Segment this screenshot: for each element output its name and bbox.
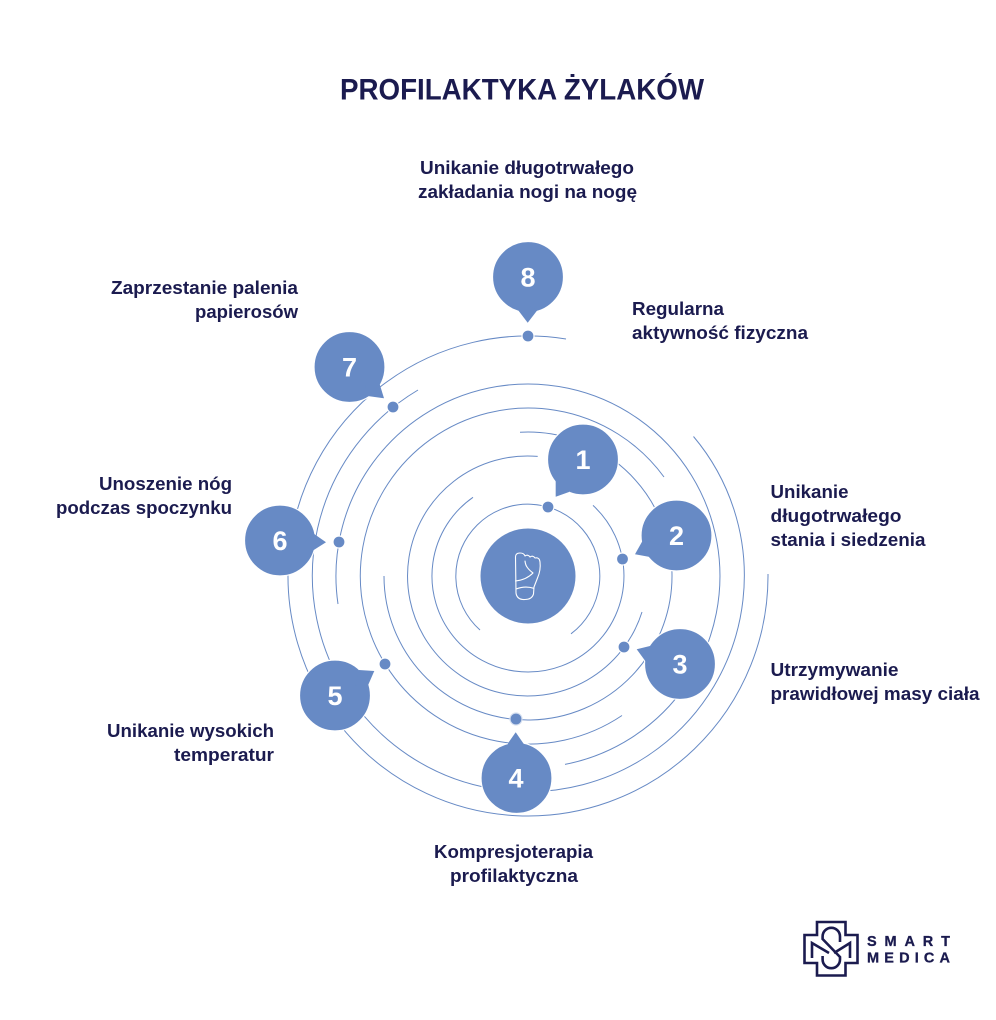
- bubble 1: [548, 424, 618, 497]
- bubble 2: 2: [669, 521, 684, 551]
- bubble 5: 5: [327, 681, 343, 711]
- label 6: [56, 474, 232, 518]
- bubble 2: [635, 500, 712, 571]
- label 7: Zaprzestanie palenia: [111, 278, 299, 298]
- bubble 3: 3: [672, 650, 688, 680]
- bubble 6: 6: [272, 526, 288, 556]
- logo: Smart Medica: SMART: [867, 934, 950, 950]
- label 3: prawidłowej masy ciała: [770, 684, 981, 704]
- label 4: profilaktyczna: [450, 866, 579, 886]
- bubble 3: [637, 628, 716, 700]
- label 2: stania i siedzenia: [770, 530, 927, 550]
- label 7: [111, 278, 299, 322]
- label 2: Unikanie: [770, 482, 848, 502]
- label 2: [770, 482, 927, 550]
- bubble 8: [492, 242, 564, 323]
- label 6: podczas spoczynku: [56, 498, 232, 518]
- bubble 4: 4: [508, 764, 524, 794]
- label 5: [107, 721, 274, 765]
- concentric ring arcs: [288, 336, 768, 816]
- central circle with foot icon: [480, 528, 576, 624]
- label 1: [632, 299, 809, 343]
- bubble 7: 7: [342, 352, 357, 382]
- label 2: długotrwałego: [770, 506, 902, 526]
- label 5: Unikanie wysokich: [107, 721, 274, 741]
- label 4: [434, 842, 594, 886]
- label 1: Regularna: [632, 299, 725, 319]
- logo: Smart Medica: MEDICA: [867, 950, 951, 966]
- label 5: temperatur: [174, 745, 274, 765]
- label 6: Unoszenie nóg: [99, 474, 232, 494]
- label 8: [418, 158, 637, 202]
- bubble 6: [244, 505, 326, 576]
- bubble 7: [314, 332, 385, 402]
- label 3: [770, 660, 981, 704]
- label 1: aktywność fizyczna: [632, 323, 809, 343]
- label 7: papierosów: [195, 302, 299, 322]
- icon: cross monogram: [804, 922, 858, 976]
- title: PROFILAKTYKA ŻYLAKÓW: [340, 72, 705, 106]
- bubble 4: [481, 732, 552, 814]
- bubble 8: 8: [520, 262, 536, 292]
- icon: foot: [516, 553, 540, 600]
- marker dots: [333, 330, 630, 725]
- label 4: Kompresjoterapia: [434, 842, 594, 862]
- label 8: Unikanie długotrwałego: [420, 158, 634, 178]
- bubble 1: 1: [575, 445, 591, 475]
- bubble 5: [300, 660, 374, 731]
- label 8: zakładania nogi na nogę: [418, 182, 637, 202]
- label 3: Utrzymywanie: [770, 660, 898, 680]
- logo: Smart Medica: [804, 922, 951, 976]
